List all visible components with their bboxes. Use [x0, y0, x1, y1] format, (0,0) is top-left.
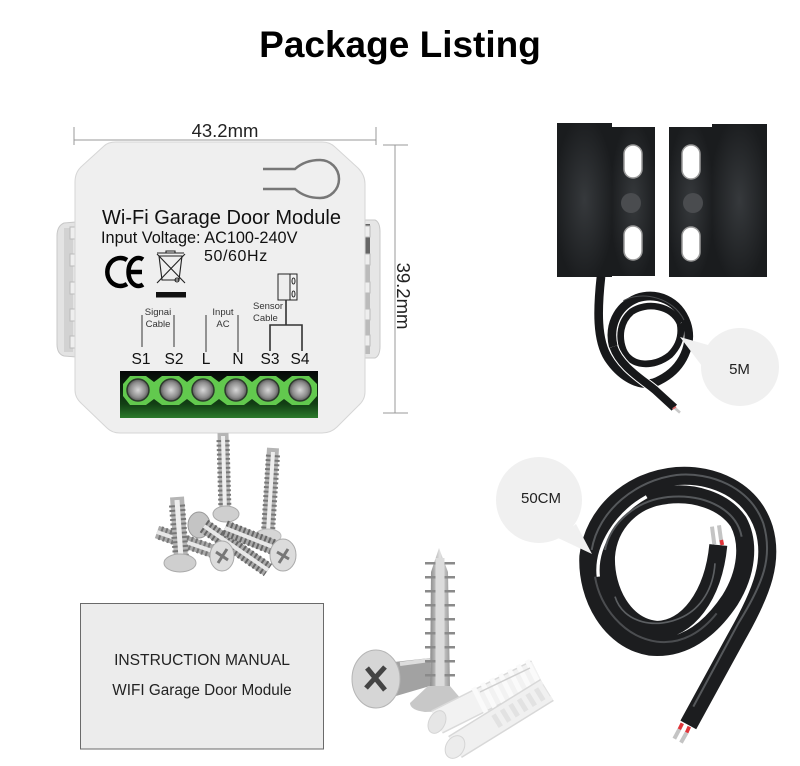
- instruction manual: INSTRUCTION MANUAL: [114, 652, 290, 669]
- upright screw: [410, 548, 461, 712]
- sensor cable label: Sensor: [253, 301, 283, 312]
- screw: short left: [164, 497, 196, 572]
- height dimension: 39.2mm: 39.2mm: [393, 263, 414, 329]
- 50CM cable: [588, 475, 767, 743]
- wiring lines: [142, 315, 238, 352]
- screw: lying right: [225, 528, 296, 571]
- icon: CE mark: [107, 258, 143, 286]
- terminal labels: [132, 351, 310, 368]
- icon: crossed-out bin: [157, 251, 185, 283]
- screw: tall centre: [213, 433, 239, 522]
- right sensor half: [669, 124, 767, 277]
- wi-fi garage door module: [57, 142, 380, 433]
- instruction manual: WIFI Garage Door Module: [112, 682, 292, 699]
- input voltage: Input Voltage: AC100-240V: [101, 229, 298, 247]
- input AC label: Input: [212, 307, 234, 318]
- sensor wiring: [270, 300, 302, 351]
- terminal labels: L: [202, 351, 211, 368]
- left side clip: [57, 222, 81, 357]
- flat-head screw lying: [352, 650, 430, 708]
- callout: 50CM: [496, 457, 592, 554]
- pairing button outline: [263, 160, 339, 198]
- callout: 5M: 5M: [729, 361, 750, 378]
- signal cable label: Cable: [146, 319, 170, 330]
- large screw and wall plugs: [352, 548, 547, 762]
- terminal labels: S4: [291, 351, 310, 368]
- wall plug front: [441, 690, 547, 762]
- screw head: front left: [210, 541, 234, 571]
- magnetic door sensor with cable: [557, 123, 767, 413]
- small screws: [157, 433, 296, 572]
- width dimension: 43.2mm: 43.2mm: [192, 120, 258, 141]
- icon: solid bar: [156, 292, 186, 298]
- screw: lying middle: [188, 512, 268, 570]
- instruction manual: [80, 604, 324, 749]
- signal cable label: Signai: [145, 307, 171, 318]
- title: Package Listing: [259, 24, 541, 65]
- module name: Wi-Fi Garage Door Module: [102, 207, 341, 229]
- wall plug back: [424, 668, 537, 736]
- left sensor half: [557, 123, 655, 277]
- callout: 5M: [680, 328, 779, 406]
- terminal labels: S3: [261, 351, 279, 368]
- terminal labels: S1: [132, 351, 150, 368]
- terminal labels: S2: [165, 351, 183, 368]
- right side clip: [359, 220, 380, 358]
- terminal labels: N: [232, 351, 244, 368]
- input AC label: AC: [216, 319, 230, 330]
- sensor cable label: Cable: [253, 313, 278, 324]
- coiled 5M cable: [599, 277, 689, 413]
- icon: door sensor: [278, 274, 297, 300]
- module body: [75, 142, 365, 433]
- frequency: 50/60Hz: [204, 248, 268, 265]
- screw: lying left: [157, 532, 218, 553]
- callout: 50CM: 50CM: [521, 490, 561, 507]
- screw: tall right: [255, 448, 281, 543]
- green terminal block: [120, 371, 318, 418]
